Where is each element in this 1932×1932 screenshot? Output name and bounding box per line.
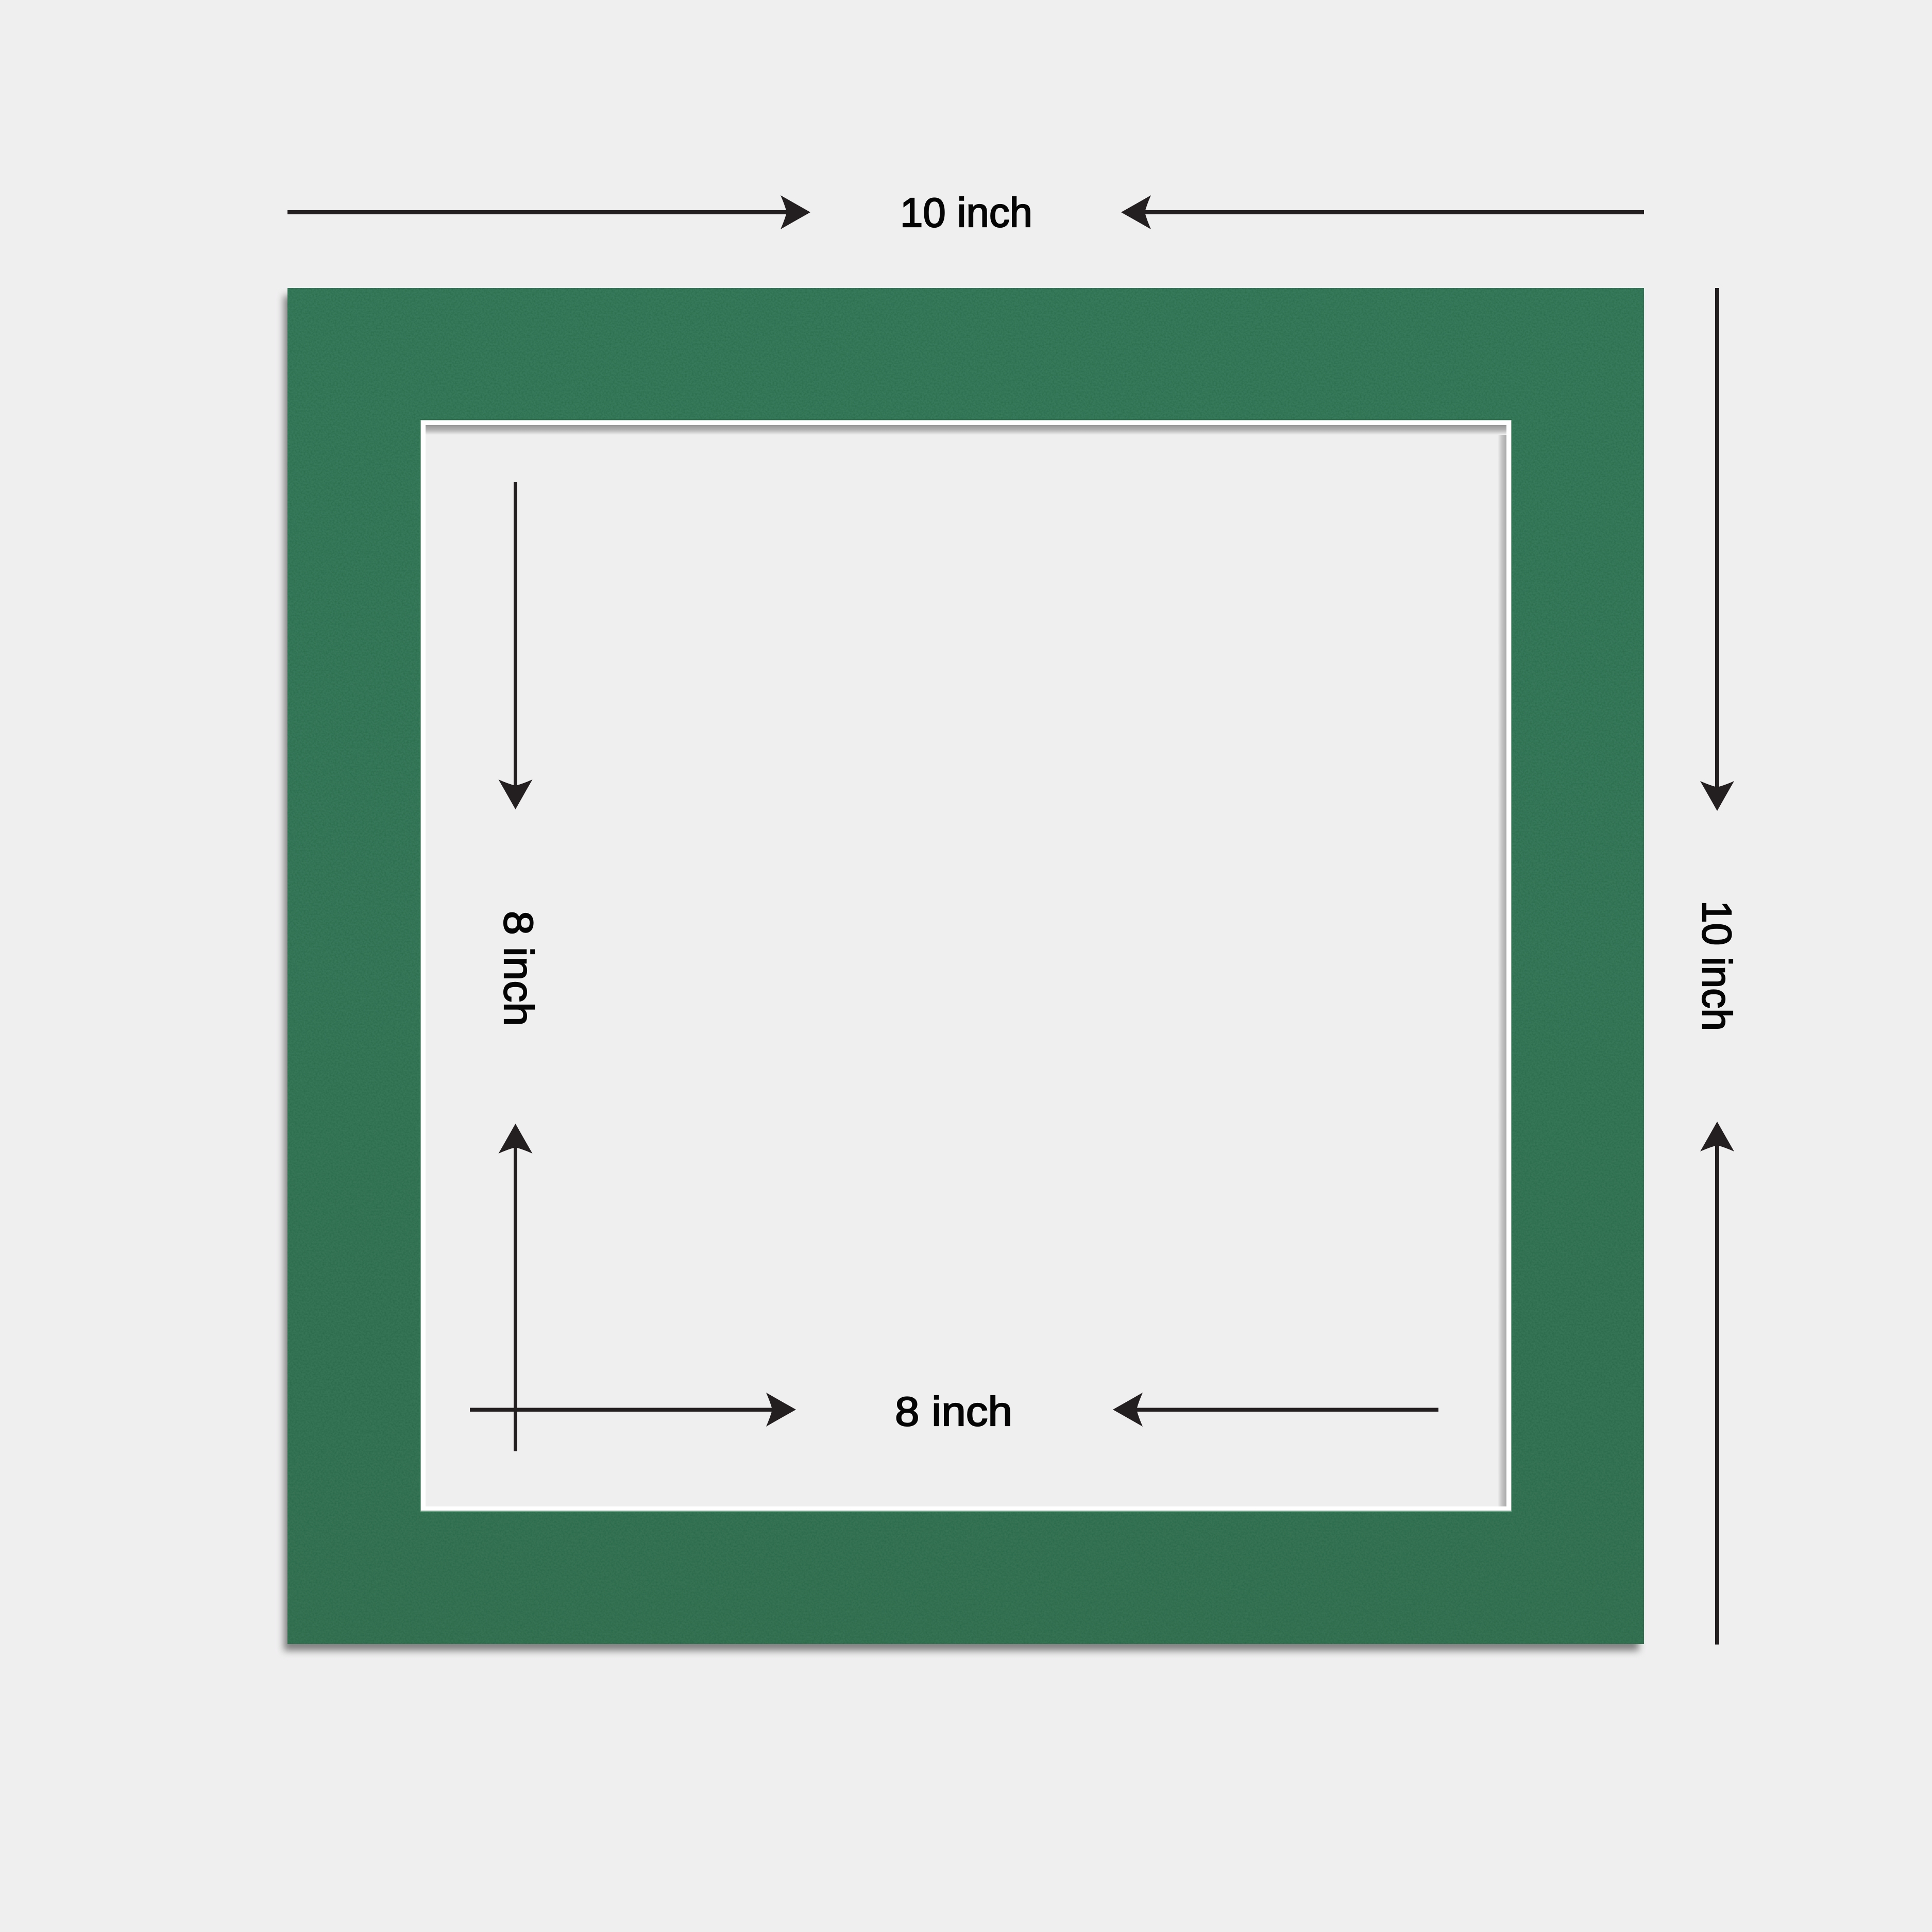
window bevel edge bbox=[420, 419, 1512, 1512]
arrow: inner bottom right pointing left bbox=[1113, 1393, 1438, 1427]
arrow: top right pointing left bbox=[1121, 195, 1644, 229]
green mat surface bbox=[287, 288, 1644, 1644]
inner left dimension: 8 inch bbox=[496, 482, 541, 1451]
label: 8 inch left: 8 inch bbox=[496, 911, 541, 1026]
mat board with window opening bbox=[284, 288, 1644, 1651]
arrow: top left pointing right bbox=[287, 195, 810, 229]
mat drop shadow bbox=[284, 296, 1639, 1651]
arrow: inner left lower pointing up bbox=[499, 1124, 533, 1451]
right dimension: 10 inch bbox=[1694, 288, 1740, 1645]
label: 10 inch top: 10 inch bbox=[900, 190, 1032, 235]
arrow: right upper pointing down bbox=[1700, 288, 1734, 811]
label: 8 inch bottom: 8 inch bbox=[895, 1388, 1012, 1434]
arrow: inner left upper pointing down bbox=[499, 482, 533, 809]
arrow: inner bottom left pointing right bbox=[470, 1393, 796, 1427]
arrow: right lower pointing up bbox=[1700, 1122, 1734, 1645]
inner bottom dimension: 8 inch bbox=[470, 1388, 1438, 1434]
label: 10 inch right: 10 inch bbox=[1694, 901, 1740, 1031]
window opening bbox=[426, 425, 1506, 1506]
window right inner shadow bbox=[1498, 425, 1506, 1506]
top dimension: 10 inch bbox=[287, 190, 1644, 235]
window top inner shadow bbox=[426, 425, 1506, 435]
